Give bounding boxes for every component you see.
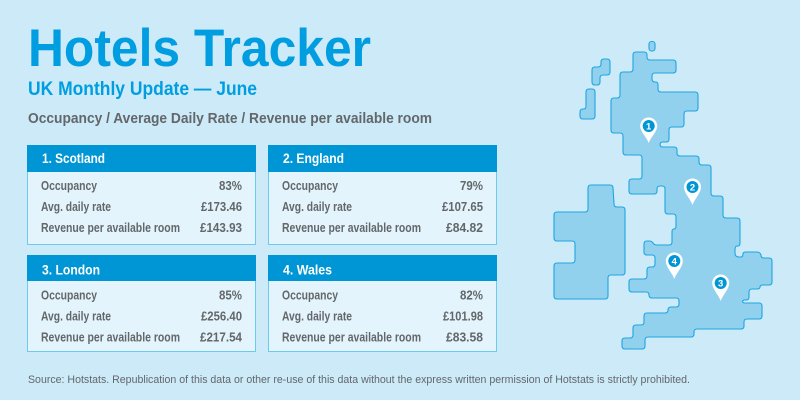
panel: Wales <box>268 255 497 352</box>
row: average daily rate <box>41 310 242 324</box>
row: average daily rate: £107.65 <box>442 200 483 214</box>
panel: London <box>27 255 256 352</box>
row: occupancy <box>41 288 242 302</box>
pin 2: England: 2 <box>690 182 695 193</box>
panel: Scotland <box>27 145 256 244</box>
row: revenue per available room: Revenue per available room <box>41 330 180 344</box>
row: occupancy: Occupancy <box>41 288 97 302</box>
map: Outer Hebrides north <box>592 59 610 85</box>
row: revenue per available room: Revenue per available room <box>282 221 421 235</box>
row: occupancy <box>282 179 483 193</box>
row: revenue per available room: Revenue per available room <box>282 330 421 344</box>
row: occupancy <box>282 288 483 302</box>
row: occupancy: 83% <box>219 179 242 193</box>
row: revenue per available room: £217.54 <box>200 330 242 344</box>
pin 3: London <box>712 274 729 301</box>
row: average daily rate <box>282 200 483 214</box>
map of UK and Ireland <box>554 42 772 349</box>
row: occupancy: Occupancy <box>282 179 338 193</box>
pin 1: Scotland: 1 <box>646 121 652 132</box>
pin 4: Wales: 4 <box>672 256 678 267</box>
row: occupancy: 85% <box>219 288 242 302</box>
row: revenue per available room: £83.58 <box>446 330 483 344</box>
row: occupancy: 82% <box>460 288 483 302</box>
row: average daily rate: £101.98 <box>443 310 483 324</box>
pin 2: England <box>684 178 701 205</box>
row: occupancy <box>41 179 242 193</box>
row: average daily rate <box>41 200 242 214</box>
heading: London: 3. London <box>42 262 100 278</box>
row: revenue per available room: £143.93 <box>200 221 242 235</box>
panel: England <box>268 145 497 244</box>
row: average daily rate: £173.46 <box>201 200 242 214</box>
pin 3: London: 3 <box>718 278 723 289</box>
row: average daily rate: Avg. daily rate <box>41 200 111 214</box>
heading: Scotland: 1. Scotland <box>42 150 105 166</box>
row: average daily rate: £256.40 <box>201 310 242 324</box>
pin 4: Wales <box>666 252 683 279</box>
row: revenue per available room: £84.82 <box>446 221 483 235</box>
map: Outer Hebrides south <box>580 89 595 119</box>
row: revenue per available room: Revenue per available room <box>41 221 180 235</box>
map: Great Britain <box>611 52 772 349</box>
row: average daily rate: Avg. daily rate <box>282 200 352 214</box>
heading: England: 2. England <box>283 150 344 166</box>
row: occupancy: Occupancy <box>41 179 97 193</box>
row: occupancy: Occupancy <box>282 288 338 302</box>
subtitle: UK Monthly Update — June <box>28 78 257 100</box>
map: Ireland <box>554 185 625 299</box>
title: Hotels Tracker <box>28 19 371 78</box>
row: occupancy: 79% <box>460 179 483 193</box>
heading: Wales: 4. Wales <box>283 262 332 278</box>
source note: Source: Hotstats. Republication of this data or other re-use of this data without the express written permission of Hotstats is strictly prohibited. <box>28 374 690 386</box>
metrics line: Occupancy / Average Daily Rate / Revenue per available room <box>28 111 432 127</box>
pin 1: Scotland <box>640 118 657 143</box>
row: average daily rate <box>282 310 483 324</box>
map: Shetland <box>649 42 655 51</box>
row: average daily rate: Avg. daily rate <box>41 310 111 324</box>
row: average daily rate: Avg. daily rate <box>282 310 352 324</box>
